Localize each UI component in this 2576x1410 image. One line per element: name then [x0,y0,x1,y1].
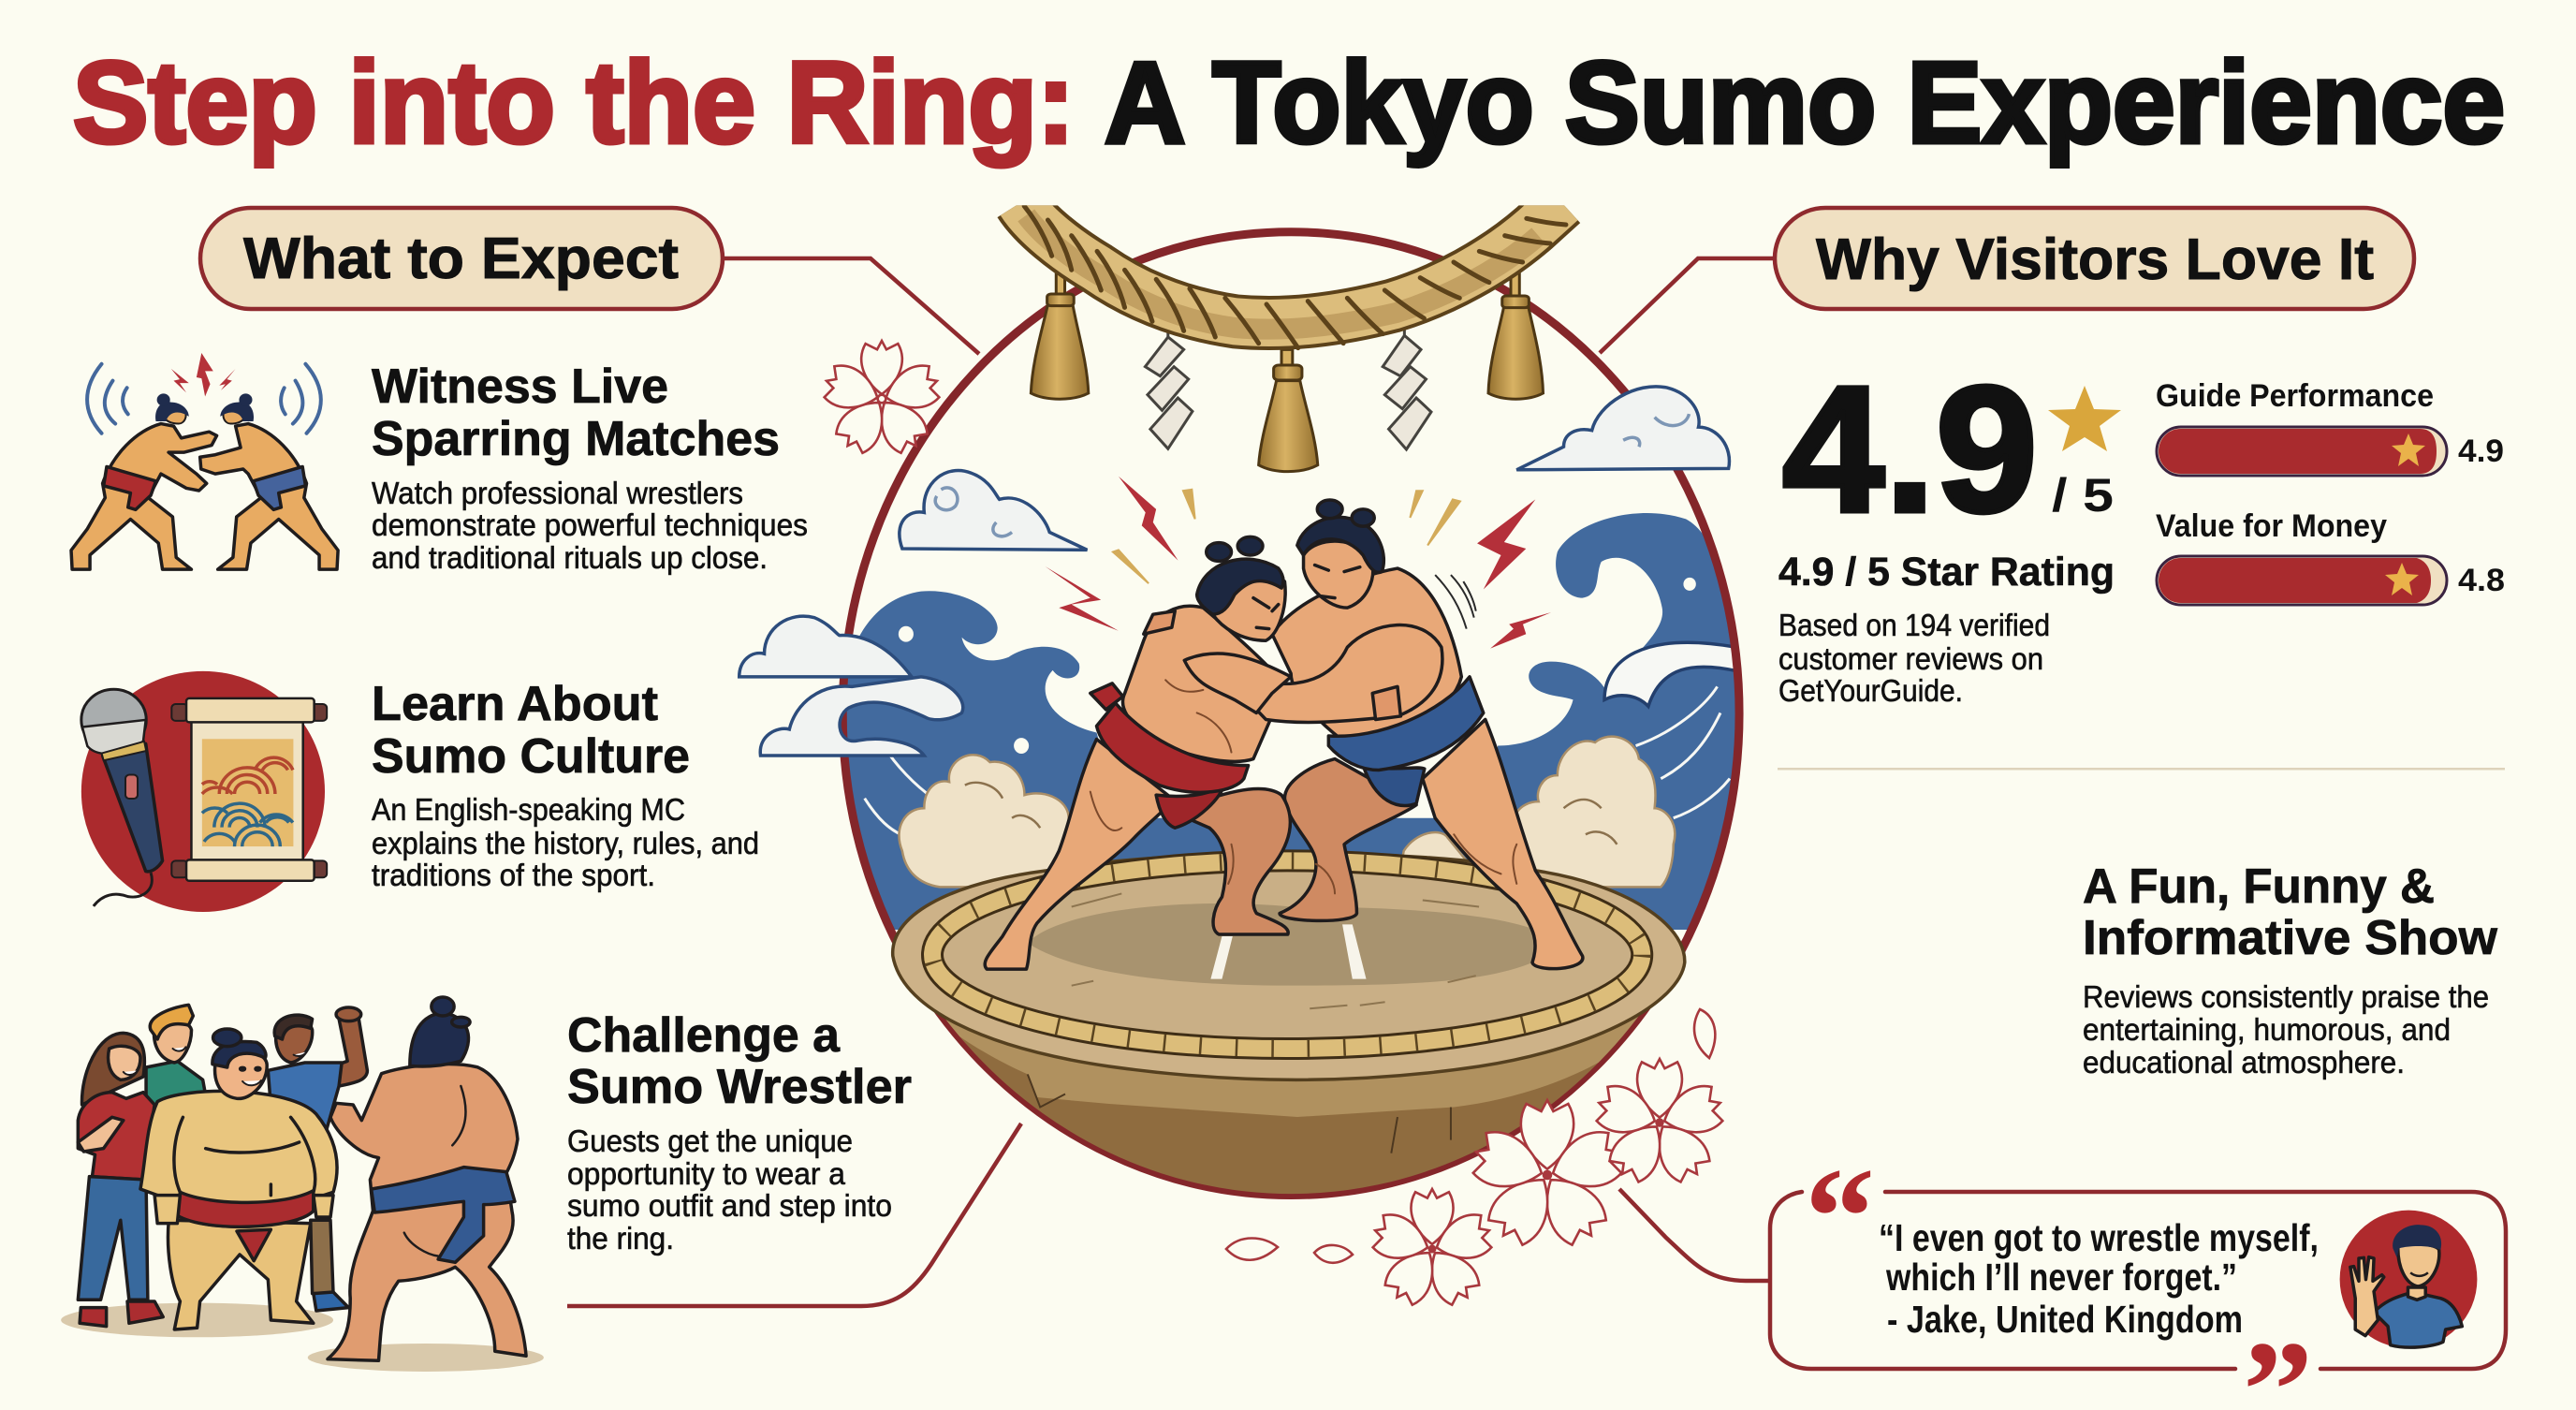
text block [567,1008,912,1256]
bar: value for money [2156,508,2505,605]
central illustration: sumo ring [739,232,1746,1199]
clay surface [936,864,1638,1046]
loose petals [1226,1009,1715,1263]
text block: fun show: Reviews consistently praise the [2083,979,2489,1014]
title [73,39,2505,168]
connector lines from headings [567,258,1775,1306]
bar: value for money: 4.8 [2458,563,2505,598]
woman guest [78,1033,163,1327]
text block: Guests get the unique [567,1124,853,1158]
divider [1778,768,2505,770]
text block: Witness Live [372,360,668,414]
text block: explains the history, rules, and [372,826,759,860]
text block: Sparring Matches [372,412,780,466]
outer ring [842,232,1739,1196]
testimonial callout [1770,1139,2506,1410]
text block: fun show [2083,859,2498,1080]
testimonial callout: which I’ll never forget.” [1885,1256,2237,1299]
text block: sumo outfit and step into [567,1188,892,1223]
text block: An English-speaking MC [372,792,685,827]
rope with tassels and paper [1020,203,1566,472]
heading: why visitors love it: Why Visitors Love It [1816,228,2374,292]
bar: guide performance: 4.9 [2458,433,2504,469]
red wrestler [985,536,1442,969]
illustration: guests and wrestler [61,997,544,1372]
text block: fun show: educational atmosphere. [2083,1045,2405,1080]
impact bolts and sparks [1046,477,1551,649]
rating score: customer reviews on [1778,641,2043,676]
text block: traditions of the sport. [372,858,655,892]
rating score [1778,348,2121,708]
bar: guide performance [2156,378,2504,476]
text block: Challenge a [567,1008,841,1063]
text block: Watch professional wrestlers [372,476,743,510]
blossom right [1592,1059,1727,1187]
text block: opportunity to wear a [567,1156,846,1191]
rating score: GetYourGuide. [1778,673,1963,708]
paper streamers [1145,323,1431,449]
rating score: 4.9 [1782,348,2038,550]
text block: fun show: entertaining, humorous, and [2083,1012,2451,1047]
heading: what to expect [200,208,723,309]
text block [372,360,808,575]
item: sumo culture [81,671,759,912]
text block: and traditional rituals up close. [372,540,768,575]
platform underside [945,1017,1638,1195]
testimonial callout: “I even got to wrestle myself, [1879,1216,2319,1259]
testimonial callout: “ [1805,1139,1875,1295]
text block: the ring. [567,1221,674,1256]
guest in suit [140,1029,337,1329]
text block: demonstrate powerful techniques [372,507,808,542]
title: A Tokyo Sumo Experience [1105,39,2505,168]
shikiri lines [1210,924,1367,979]
smoke clouds [899,737,1675,887]
rating score: / 5 [2052,469,2114,521]
dark guest [268,1007,367,1311]
rating score: Based on 194 verified [1778,608,2050,642]
text block: fun show: A Fun, Funny & [2083,859,2435,914]
text block: Sumo Culture [372,729,690,784]
item: challenge [61,997,912,1372]
icon: sparring wrestlers [71,353,338,569]
clouds [739,387,1729,756]
blossom bottom [1368,1189,1496,1310]
item: live sparring [71,353,808,575]
icon: waving guest avatar [2340,1211,2477,1348]
platform top [893,853,1685,1080]
heading: why visitors love it [1775,208,2414,309]
blossom upper left [820,341,944,458]
wrestler from behind [328,997,526,1360]
text block: fun show: Informative Show [2083,911,2498,965]
tassels [1031,265,1544,472]
text block [372,677,759,892]
straw bale ring [932,860,1642,1049]
bar: value for money: Value for Money [2156,508,2387,544]
icon: microphone and scroll [81,671,327,912]
testimonial callout: - Jake, United Kingdom [1887,1298,2243,1341]
waves [840,513,1742,930]
bar: guide performance: Guide Performance [2156,378,2434,414]
text block: Learn About [372,677,658,731]
text block: Sumo Wrestler [567,1060,912,1114]
rating score: 4.9 / 5 Star Rating [1778,550,2115,595]
icon: star [2048,386,2121,451]
sakura blossoms [820,341,1727,1310]
heading: what to expect: What to Expect [243,227,679,291]
blue wrestler [1272,500,1583,969]
title: Step into the Ring: [73,39,1075,168]
blond guest [146,1005,206,1126]
blossom large [1468,1100,1627,1251]
